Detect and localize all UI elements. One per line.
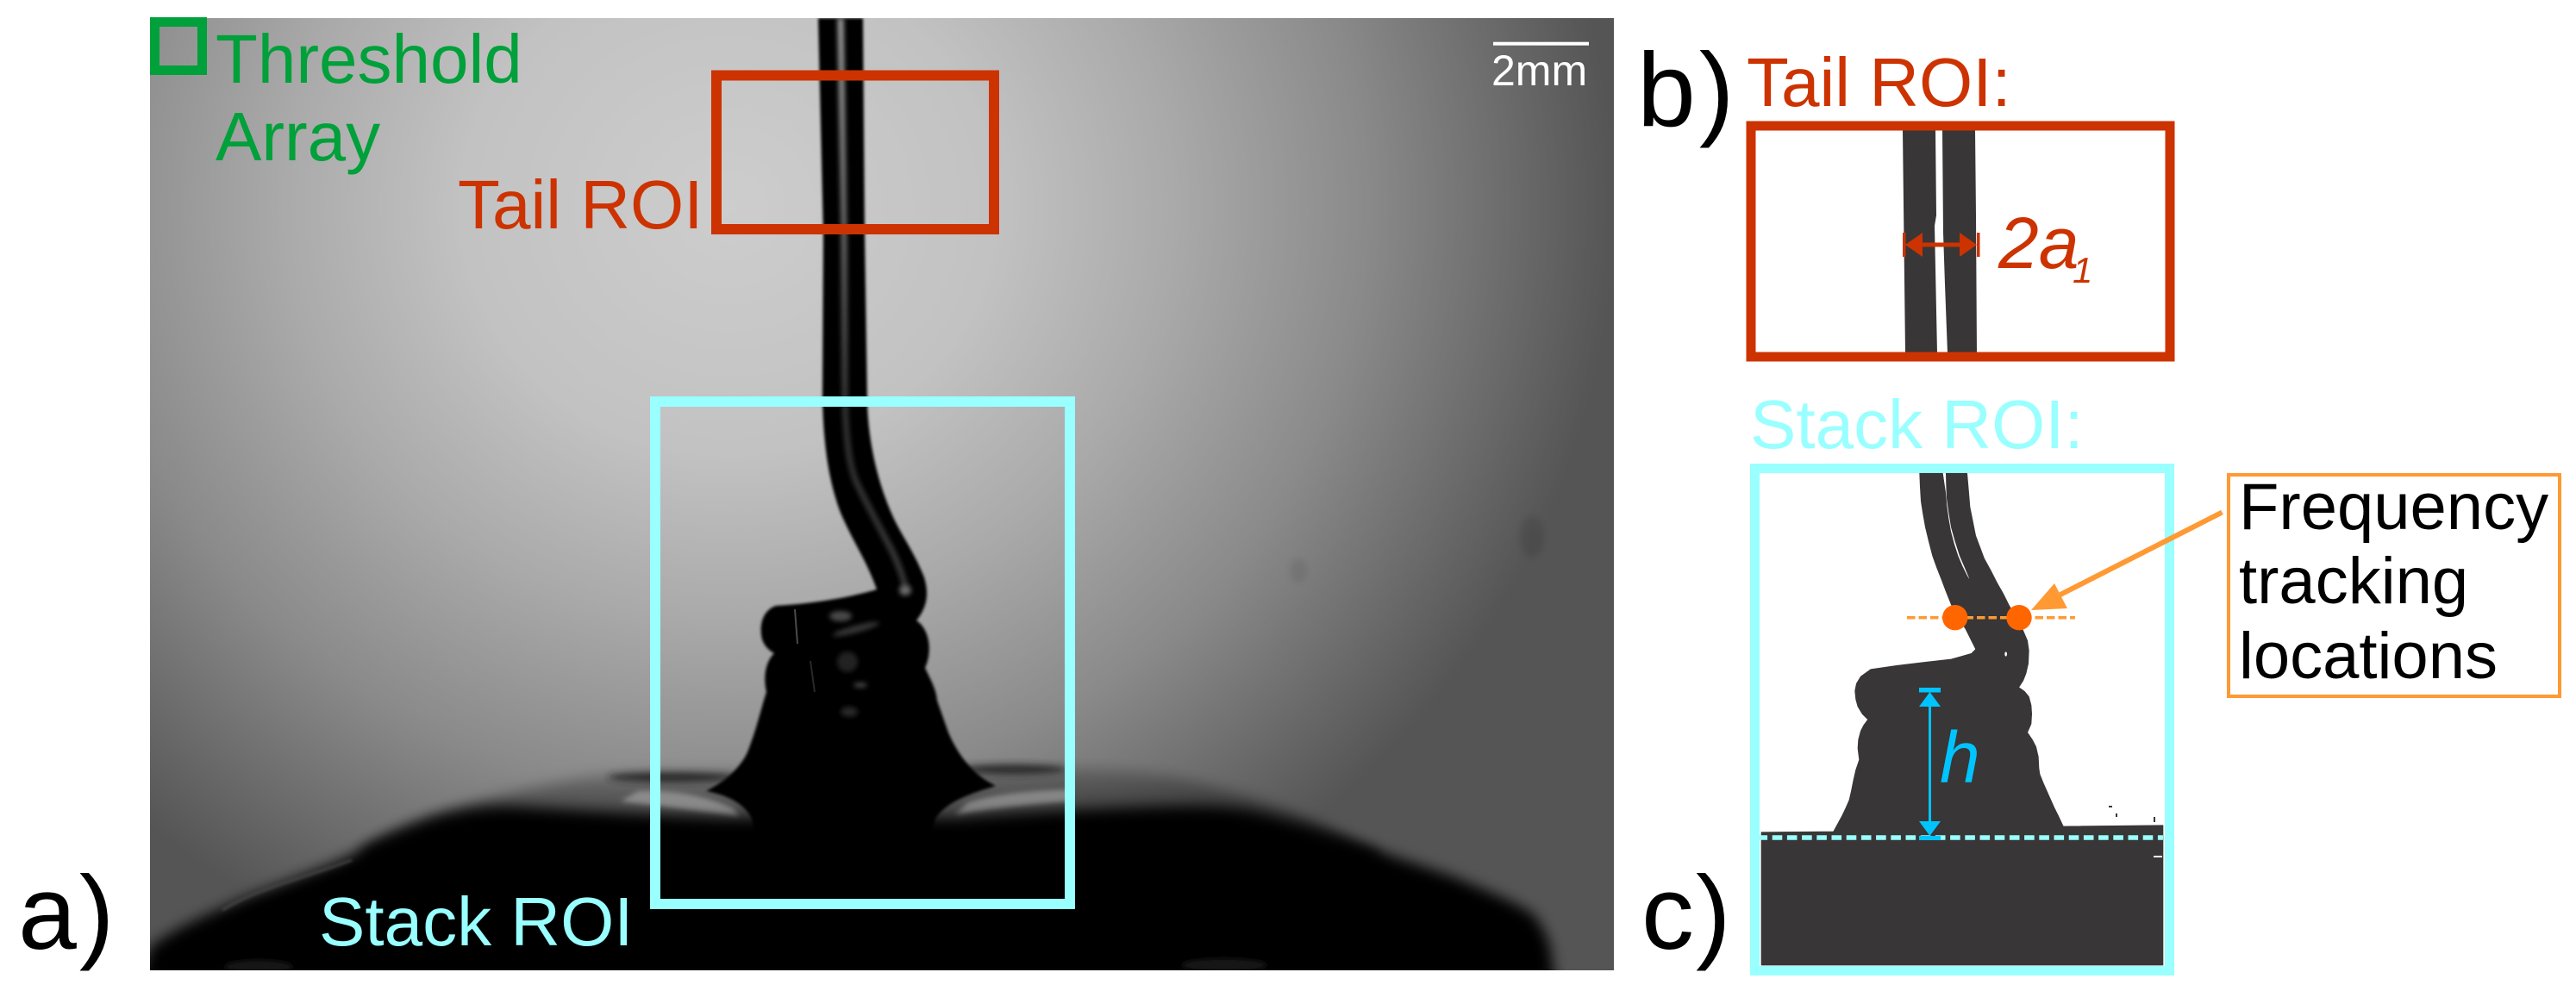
scale bar: 2mm xyxy=(1491,47,1587,95)
threshold specks xyxy=(2109,806,2162,857)
height label h: h xyxy=(1940,717,1980,798)
panel label c: c) xyxy=(1641,854,1733,971)
stack ROI frame xyxy=(1755,469,2169,970)
photo: backlit background xyxy=(150,18,1614,970)
panel label b: b) xyxy=(1637,31,1737,148)
tracking point right xyxy=(2006,605,2032,630)
callout: frequency tracking locations: locations xyxy=(2239,620,2498,693)
panel b: tail threshold view xyxy=(1751,126,2170,357)
threshold array box xyxy=(155,22,202,71)
stack ROI label: Stack ROI xyxy=(319,883,634,960)
panel a: photograph xyxy=(18,18,1614,982)
photo: liquid pool and coiling stack xyxy=(138,18,1555,982)
panel c heading: Stack ROI: xyxy=(1750,386,2084,463)
tail ROI box xyxy=(716,76,994,229)
height arrow h xyxy=(1919,688,1941,840)
tracking line xyxy=(1907,616,2075,619)
thresholded stack silhouette xyxy=(1761,473,2163,965)
panel b heading: Tail ROI: xyxy=(1747,44,2011,121)
callout: frequency tracking locations: Frequency xyxy=(2239,471,2548,544)
panel label a: a) xyxy=(18,854,116,971)
tail fibres xyxy=(1903,130,1977,353)
threshold array label: Threshold xyxy=(216,21,522,97)
threshold array label: Array xyxy=(216,98,380,175)
callout: frequency tracking locations: tracking xyxy=(2239,545,2468,618)
callout: frequency tracking locations xyxy=(2229,471,2560,696)
width label 2a1: 1 xyxy=(2073,250,2092,290)
panel c: stack threshold view xyxy=(1755,469,2169,970)
stack ROI box xyxy=(655,402,1070,904)
width arrow 2a1 xyxy=(1903,233,1979,257)
tail ROI frame xyxy=(1751,126,2170,357)
width label 2a1: 2a xyxy=(1998,203,2079,284)
tail ROI label: Tail ROI xyxy=(458,166,703,243)
tracking point left xyxy=(1942,605,1967,630)
callout arrow xyxy=(2031,512,2223,610)
baseline dashed line xyxy=(1757,835,2163,840)
